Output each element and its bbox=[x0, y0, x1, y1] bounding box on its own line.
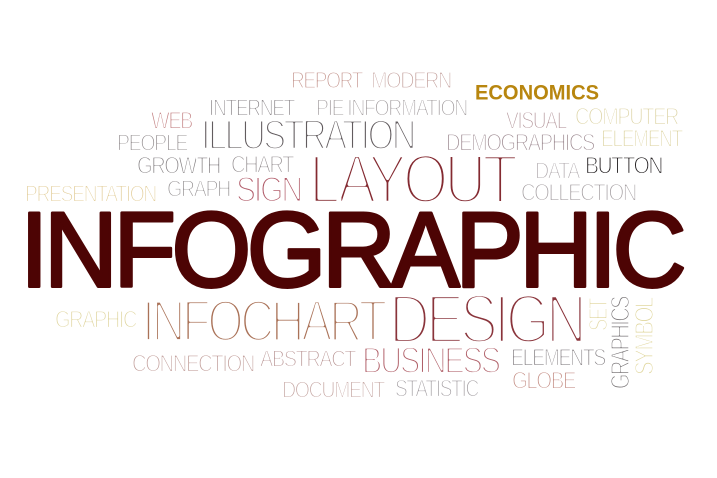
word: ABSTRACT: ABSTRACT bbox=[260, 346, 356, 372]
word: INFOCHART: INFOCHART bbox=[142, 289, 387, 354]
word: WEB: WEB bbox=[151, 108, 193, 134]
word: GROWTH: GROWTH bbox=[137, 152, 220, 180]
word: MODERN: MODERN bbox=[371, 67, 451, 93]
word: CONNECTION: CONNECTION bbox=[132, 350, 254, 378]
word: ELEMENT: ELEMENT bbox=[601, 126, 684, 152]
word: SET (vertical): SET bbox=[583, 298, 613, 331]
word: ELEMENTS: ELEMENTS bbox=[511, 344, 606, 372]
word: LAYOUT: LAYOUT bbox=[309, 140, 517, 218]
word: DATA: DATA bbox=[535, 158, 581, 184]
word: STATISTIC: STATISTIC bbox=[395, 376, 479, 402]
word: DOCUMENT: DOCUMENT bbox=[282, 376, 385, 402]
word: SYMBOL (vertical): SYMBOL bbox=[629, 297, 659, 375]
heading: INFOGRAPHIC: INFOGRAPHIC bbox=[20, 190, 683, 310]
word: PRESENTATION: PRESENTATION bbox=[25, 180, 157, 206]
word: DEMOGRAPHICS: DEMOGRAPHICS bbox=[446, 130, 595, 156]
word: VISUAL: VISUAL bbox=[506, 108, 567, 134]
word: CHART: CHART bbox=[231, 152, 295, 178]
word: ILLUSTRATION: ILLUSTRATION bbox=[201, 111, 414, 158]
word: BUSINESS: BUSINESS bbox=[362, 340, 500, 381]
word: COLLECTION: COLLECTION bbox=[521, 180, 636, 206]
word: INTERNET: INTERNET bbox=[209, 94, 295, 120]
word: REPORT: REPORT bbox=[291, 67, 363, 93]
word: COMPUTER: COMPUTER bbox=[575, 104, 679, 130]
word: GRAPH: GRAPH bbox=[167, 176, 231, 202]
word: PIE INFORMATION: PIE INFORMATION bbox=[316, 94, 468, 120]
word: PEOPLE: PEOPLE bbox=[117, 130, 188, 156]
word: GRAPHICS (vertical): GRAPHICS bbox=[605, 296, 635, 389]
word: SIGN: SIGN bbox=[236, 170, 301, 210]
word: GLOBE: GLOBE bbox=[512, 368, 576, 394]
word: ECONOMICS: ECONOMICS bbox=[475, 80, 599, 104]
word: GRAPHIC: GRAPHIC bbox=[55, 306, 137, 334]
word: BUTTON: BUTTON bbox=[585, 152, 662, 180]
word cloud bbox=[20, 67, 684, 402]
word: DESIGN: DESIGN bbox=[389, 280, 583, 358]
